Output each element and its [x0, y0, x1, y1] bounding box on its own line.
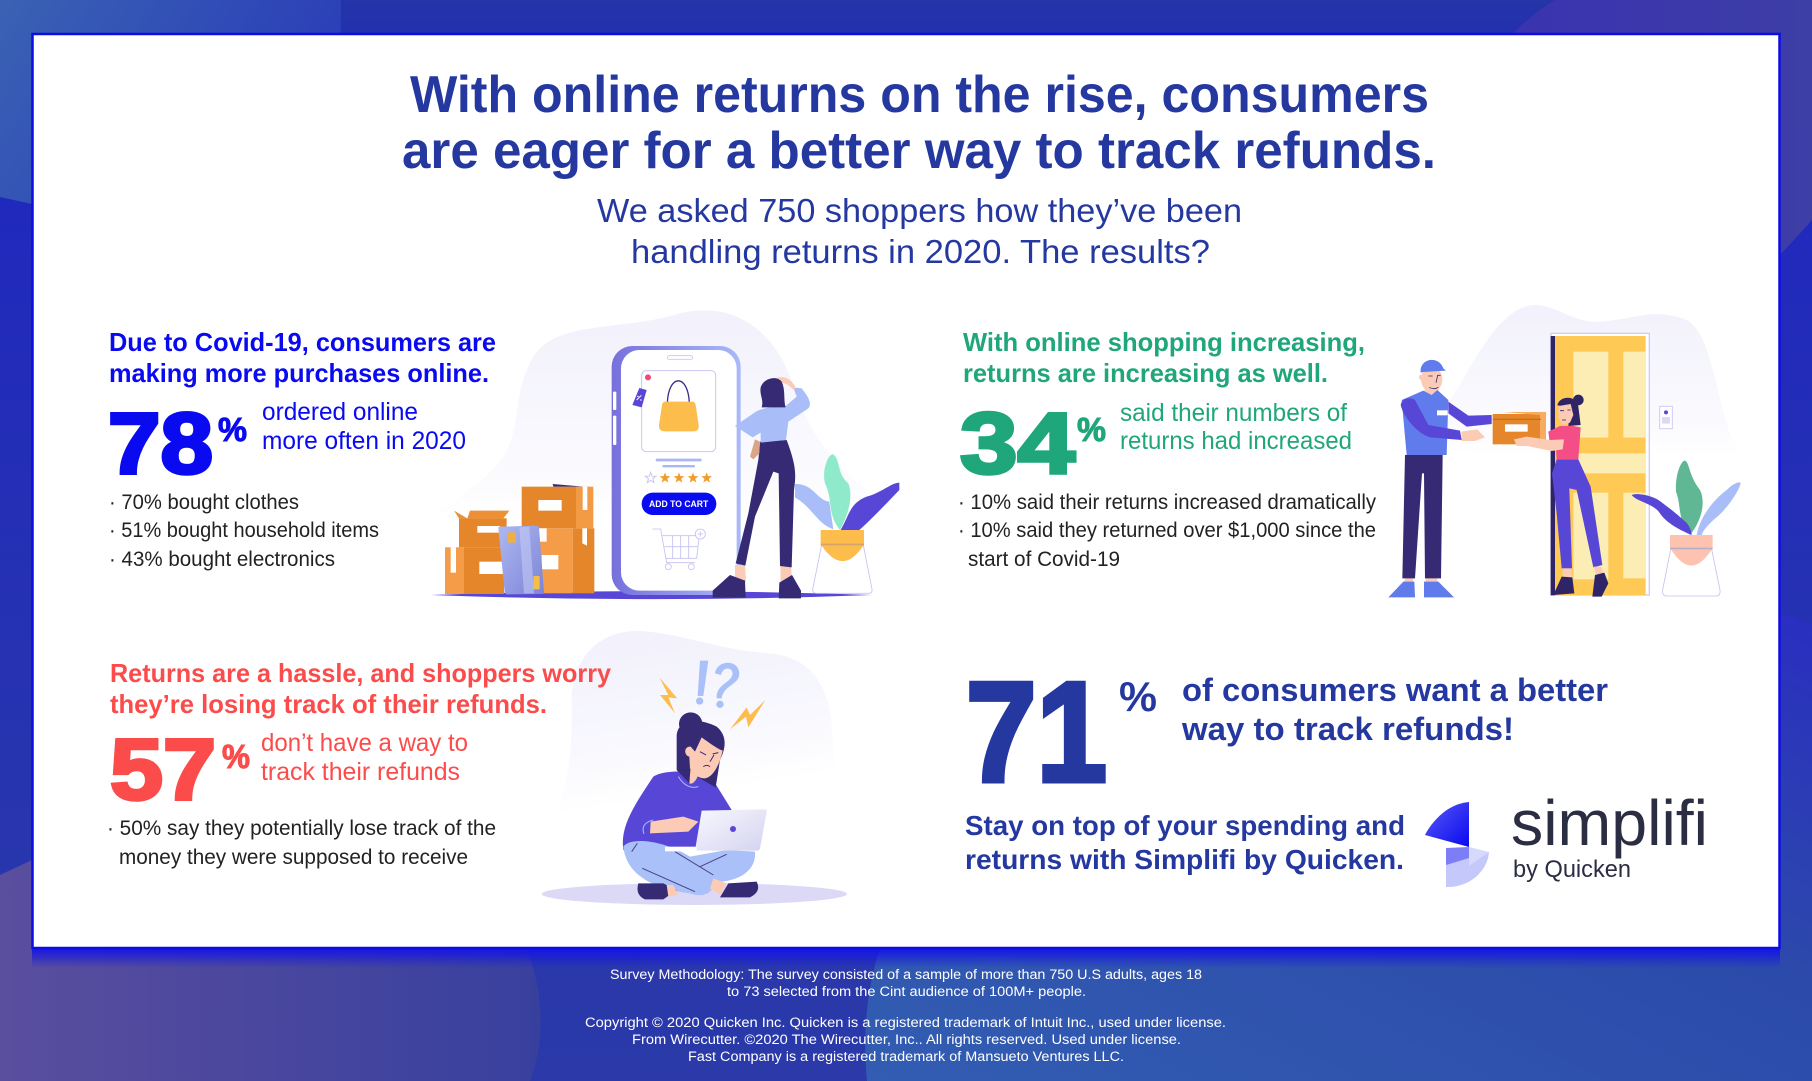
heading: hassle: Returns are a hassle, and shoppers worry	[110, 658, 612, 688]
stat caption: numbers increased: said their numbers of	[1120, 399, 1347, 427]
button: add to cart	[642, 493, 716, 515]
figure: woman looking at phone	[713, 377, 810, 598]
stat: 78 percent	[108, 396, 247, 492]
stat caption: numbers increased: returns had increased	[1120, 427, 1352, 455]
stat: 78 percent: 78	[108, 396, 213, 492]
stat: 78 percent: %	[218, 411, 247, 448]
bullets: return details	[958, 491, 1376, 571]
statement: want better tracking	[1181, 672, 1608, 747]
heading: returns increasing: With online shopping increasing,	[963, 327, 1365, 357]
icon: door	[1551, 333, 1649, 595]
footer: methodology and copyright: to 73 selected from the Cint audience of 100M+ people.	[727, 984, 1086, 999]
logo: Simplifi by Quicken: simplifi	[1511, 787, 1708, 859]
stat: 57 percent: %	[222, 738, 250, 775]
panel: online purchases text	[108, 327, 496, 571]
stat caption: no way to track	[261, 729, 468, 786]
footer: methodology and copyright: Fast Company is a registered trademark of Mansueto Ventures LLC.	[688, 1049, 1124, 1064]
footer: methodology and copyright: Copyright © 2020 Quicken Inc. Quicken is a registered trademark of Intuit Inc., used under license.	[585, 1015, 1226, 1030]
heading: purchases	[109, 327, 496, 388]
subtitle	[597, 192, 1242, 270]
call to action: Stay on top of your spending and	[965, 810, 1405, 841]
button: add to cart: ADD TO CART	[649, 499, 709, 509]
panel: key stat 71 percent	[965, 653, 1708, 887]
icon: discount tag	[632, 374, 651, 407]
icon: cardboard boxes	[445, 484, 594, 594]
panel: returns increasing text	[958, 327, 1376, 571]
title	[402, 66, 1436, 180]
heading: purchases: Due to Covid-19, consumers are	[109, 327, 496, 357]
call to action	[965, 810, 1405, 875]
illustration: shopper with phone and boxes	[430, 310, 903, 599]
title: With online returns on the rise, consumers	[410, 66, 1429, 124]
footer: methodology and copyright: Survey Methodology: The survey consisted of a sample of more than 750 U.S adults, ages 18	[610, 967, 1202, 982]
heading: hassle: they’re losing track of their refunds.	[110, 689, 547, 719]
icon: shopping cart	[652, 529, 705, 570]
icon: potted plant	[795, 454, 899, 593]
stat: 34 percent	[960, 396, 1106, 492]
bullets: return details: start of Covid-19	[968, 548, 1120, 571]
icon: doorbell	[1660, 406, 1672, 429]
call to action: returns with Simplifi by Quicken.	[965, 844, 1404, 875]
logo: Simplifi by Quicken	[1425, 787, 1708, 887]
illustration: delivery at door	[1387, 305, 1743, 597]
figure: delivery man	[1388, 360, 1492, 597]
figure: woman with laptop	[623, 712, 767, 899]
bullets: purchase categories: · 70% bought clothes	[109, 491, 299, 514]
footer: methodology and copyright	[585, 967, 1226, 1064]
bullets: purchase categories: · 51% bought household items	[109, 519, 379, 542]
stat caption: no way to track: track their refunds	[261, 758, 460, 786]
icon: smartphone	[612, 346, 741, 595]
heading: hassle	[110, 658, 612, 719]
stat caption: numbers increased	[1120, 399, 1352, 455]
bullets: lost money: money they were supposed to receive	[119, 846, 468, 869]
bullets: return details: · 10% said their returns increased dramatically	[958, 491, 1376, 514]
icon: exclamation and question marks	[696, 661, 739, 708]
icon: credit card	[498, 526, 544, 594]
icon: handbag	[659, 381, 699, 431]
subtitle: handling returns in 2020. The results?	[631, 233, 1210, 270]
stat caption: ordered online	[262, 398, 466, 455]
figure: customer	[1514, 395, 1608, 597]
statement: want better tracking: way to track refunds!	[1181, 711, 1514, 747]
bullets: lost money	[107, 817, 496, 869]
heading: returns increasing	[963, 327, 1365, 388]
logo: Simplifi by Quicken: by Quicken	[1513, 856, 1631, 883]
icon: lightning bolts	[659, 677, 765, 729]
statement: want better tracking: of consumers want a better	[1182, 672, 1608, 708]
illustration: worried woman with laptop	[542, 631, 847, 905]
stat: 71 percent: 71	[966, 653, 1107, 812]
footer: methodology and copyright: From Wirecutter. ©2020 The Wirecutter, Inc.. All rights reserved. Used under license.	[632, 1032, 1181, 1047]
stat: 57 percent	[110, 722, 250, 818]
heading: returns increasing: returns are increasing as well.	[963, 358, 1328, 388]
panel: hassle text	[107, 658, 612, 869]
icon: star rating	[645, 472, 712, 483]
title: are eager for a better way to track refunds.	[402, 122, 1436, 180]
stat: 34 percent: %	[1077, 411, 1106, 448]
bullets: purchase categories	[109, 491, 379, 571]
stat: 57 percent: 57	[110, 722, 216, 818]
heading: purchases: making more purchases online.	[109, 358, 489, 388]
bullets: return details: · 10% said they returned over $1,000 since the	[958, 519, 1376, 542]
subtitle: We asked 750 shoppers how they’ve been	[597, 192, 1242, 229]
stat caption: no way to track: don’t have a way to	[261, 729, 468, 757]
bullets: purchase categories: · 43% bought electronics	[109, 548, 335, 571]
stat: 34 percent: 34	[960, 396, 1075, 492]
stat caption: ordered online: more often in 2020	[262, 427, 466, 455]
stat: 71 percent: %	[1119, 673, 1157, 720]
icon: potted plant	[1632, 461, 1741, 596]
stat caption: ordered online: ordered online	[262, 398, 418, 426]
icon: parcel	[1493, 412, 1546, 444]
bullets: lost money: · 50% say they potentially lose track of the	[107, 817, 496, 840]
